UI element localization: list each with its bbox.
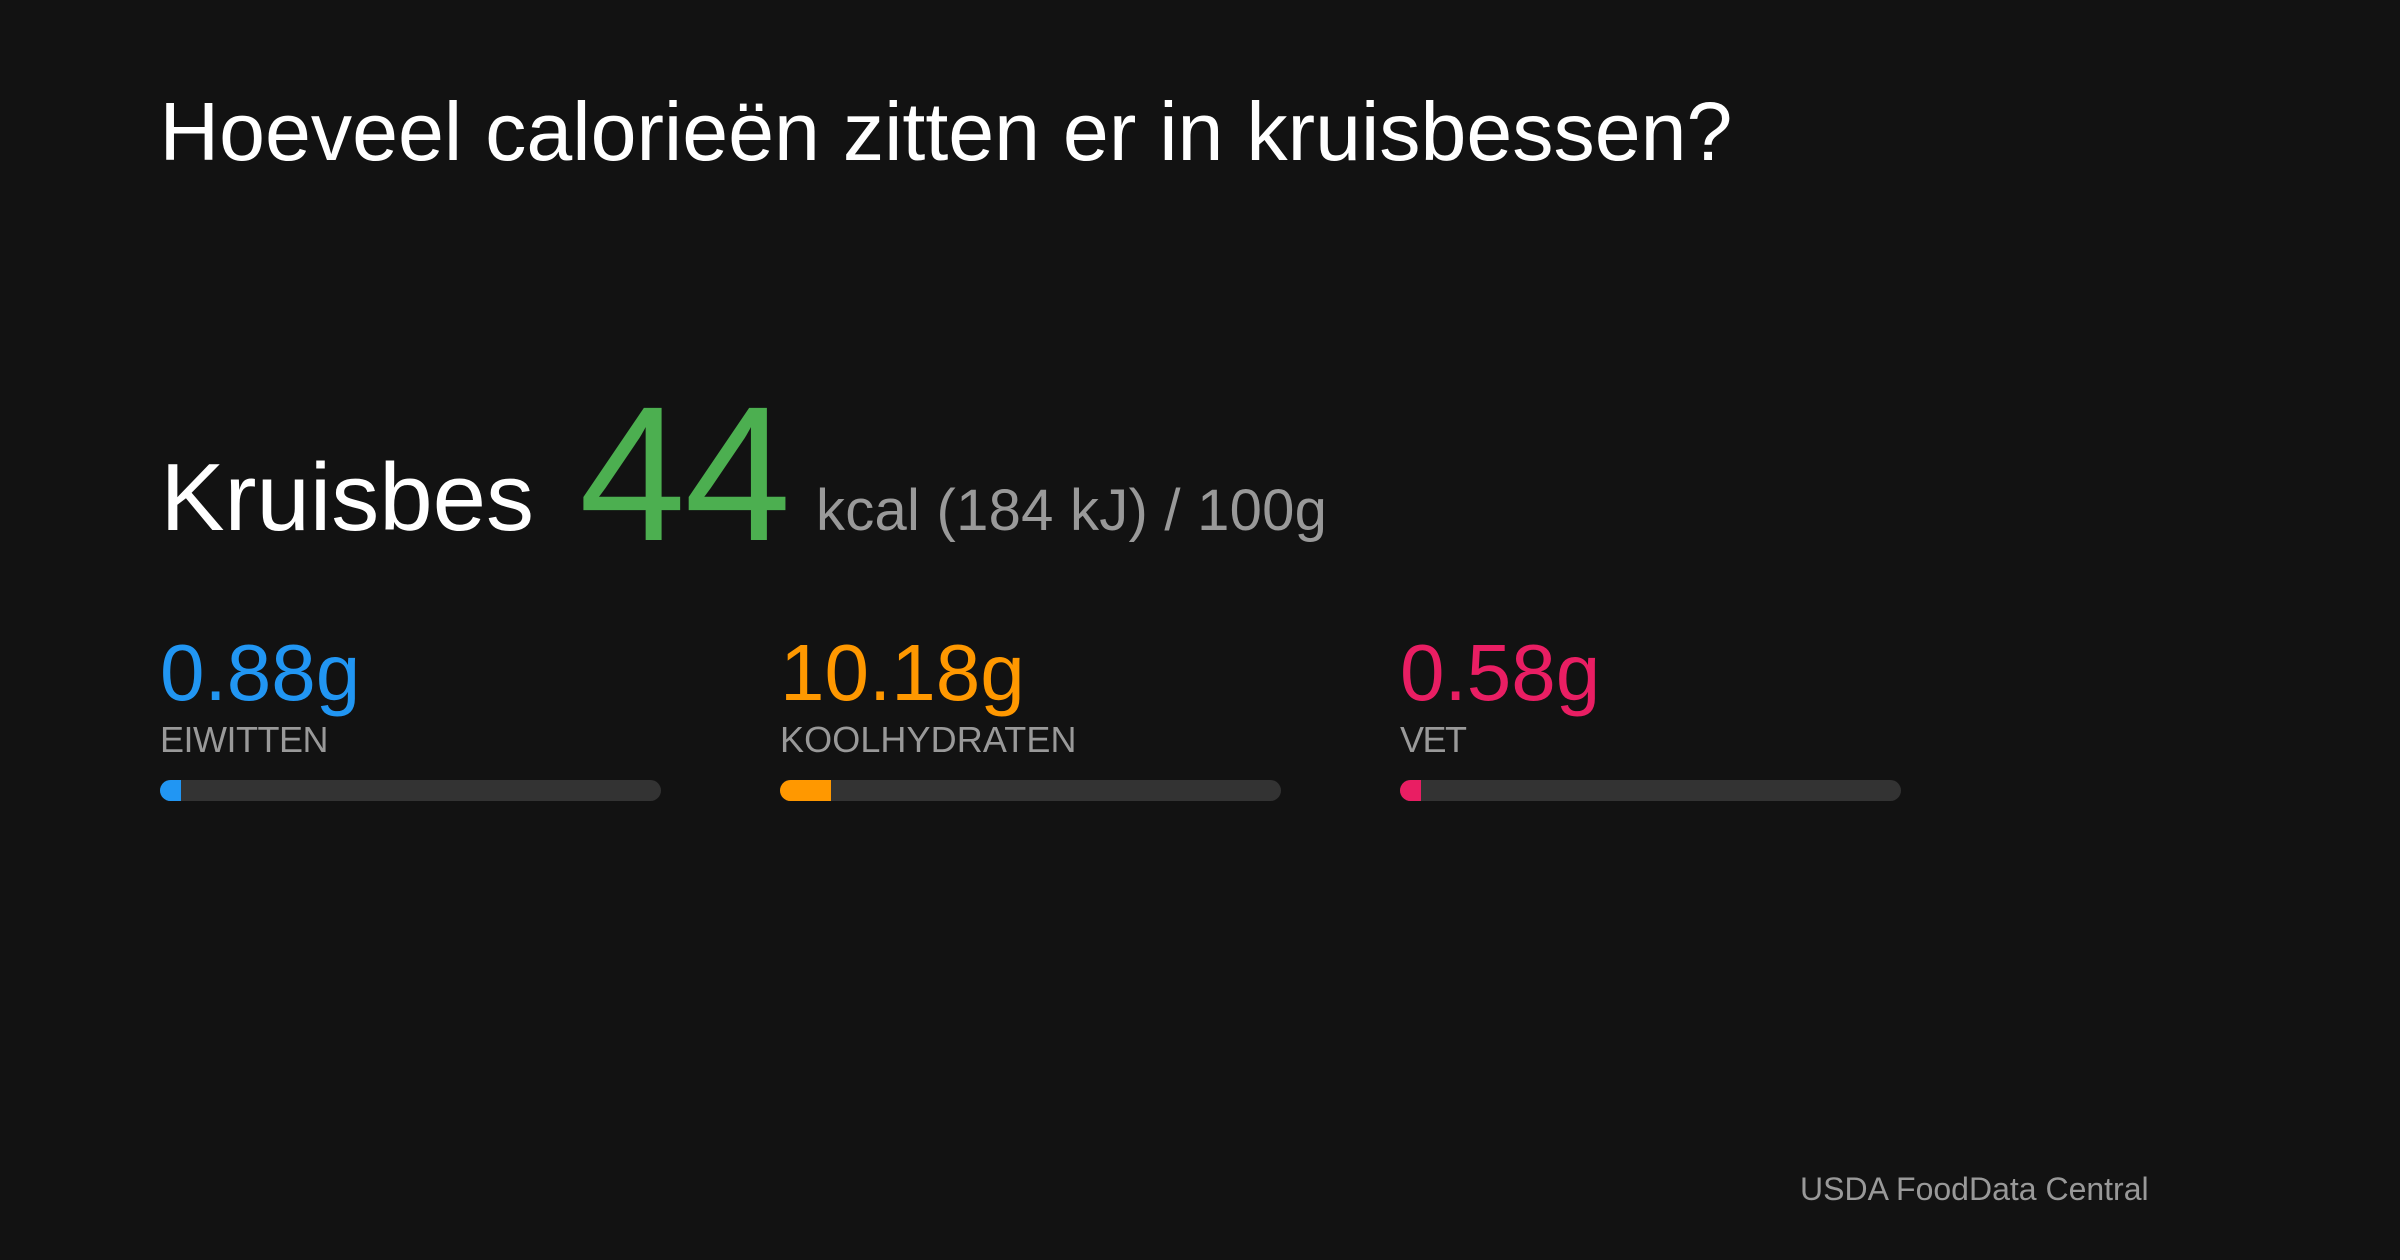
protein value: 0.88g <box>160 628 360 717</box>
calorie value: 44 <box>579 366 790 581</box>
fat value: 0.58g <box>1400 628 1600 717</box>
panel: carbohydrates <box>780 628 1281 801</box>
panel: fat <box>1400 628 1901 801</box>
food name: Kruisbes <box>160 444 534 551</box>
title: Hoeveel calorieën zitten er in kruisbessen? <box>160 86 1732 178</box>
fat label: VET <box>1400 719 1467 760</box>
panel: protein <box>160 628 661 801</box>
protein bar <box>160 780 661 801</box>
carbohydrates label: KOOLHYDRATEN <box>780 719 1077 760</box>
calorie summary <box>160 366 1327 581</box>
calorie unit: kcal (184 kJ) / 100g <box>816 478 1327 543</box>
carbohydrates value: 10.18g <box>780 628 1025 717</box>
source credit: USDA FoodData Central <box>1800 1171 2149 1207</box>
carbohydrates bar <box>780 780 1281 801</box>
protein label: EIWITTEN <box>160 719 328 760</box>
fat bar <box>1400 780 1901 801</box>
